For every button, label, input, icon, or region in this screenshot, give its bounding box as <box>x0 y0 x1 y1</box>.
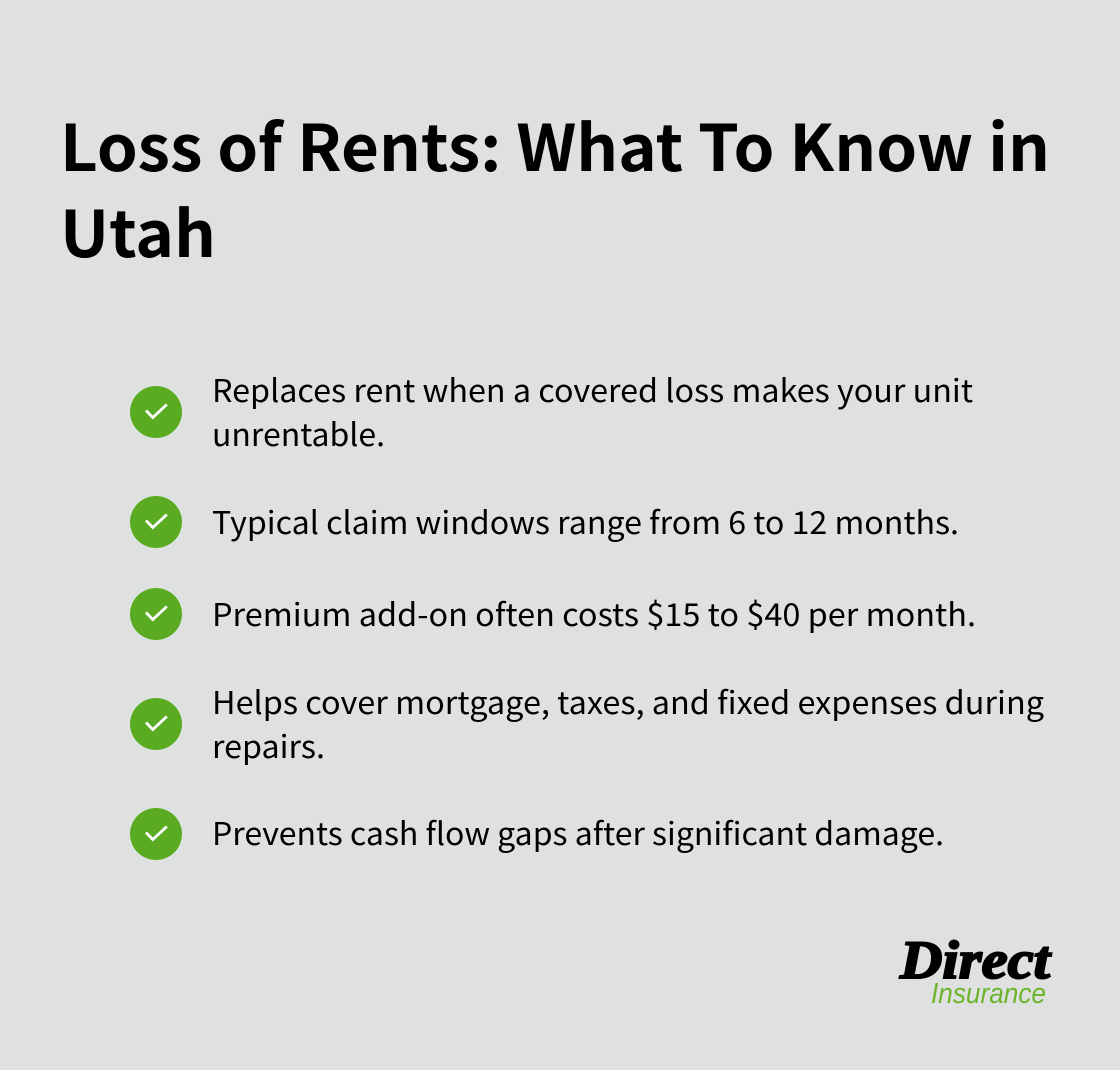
item 1: unrentable. <box>212 410 385 456</box>
item 4 <box>130 678 1044 768</box>
logo <box>899 930 1052 1010</box>
title: Loss of Rents: What To Know in <box>60 98 1050 190</box>
logo: Insurance <box>931 978 1046 1010</box>
item 1: Replaces rent when a covered loss makes your unit <box>212 366 973 412</box>
item 2: Typical claim windows range from 6 to 12 months. <box>212 498 959 544</box>
checklist <box>130 366 1044 860</box>
title: Utah <box>60 184 216 276</box>
logo: Direct <box>899 930 1052 990</box>
title <box>60 98 1050 276</box>
item 4: repairs. <box>212 722 325 768</box>
item 5: Prevents cash flow gaps after significant damage. <box>212 809 944 855</box>
item 3: Premium add-on often costs $15 to $40 per month. <box>212 590 976 636</box>
item 4: Helps cover mortgage, taxes, and fixed expenses during <box>212 678 1044 724</box>
item 1 <box>130 366 973 456</box>
